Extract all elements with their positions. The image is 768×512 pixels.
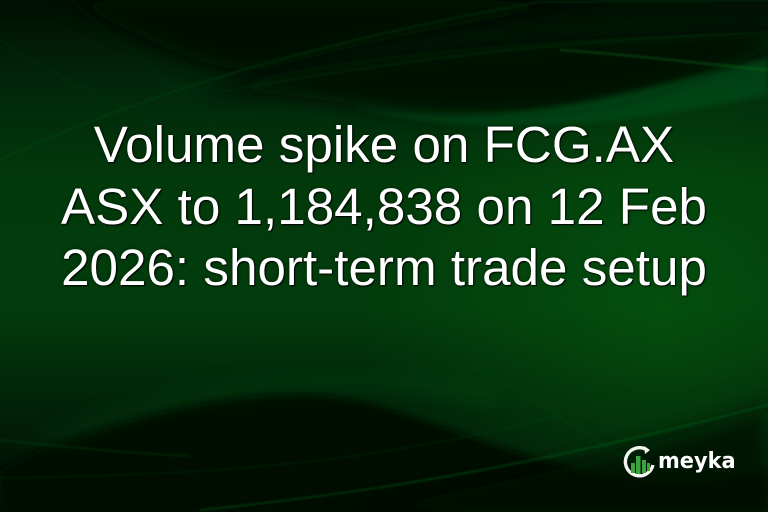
bottom dark hills bbox=[0, 394, 768, 512]
title bbox=[61, 116, 707, 298]
bottom wave lines and bands bbox=[0, 365, 768, 510]
top dark sweep bbox=[60, 0, 640, 70]
title: ASX to 1,184,838 on 12 Feb bbox=[61, 178, 707, 234]
title: 2026: short-term trade setup bbox=[61, 239, 707, 296]
top lens band bbox=[350, 58, 768, 126]
logo: meyka bbox=[624, 446, 736, 478]
title: Volume spike on FCG.AX bbox=[94, 116, 674, 173]
top wave lines bbox=[0, 0, 768, 160]
logo wordmark: meyka bbox=[658, 449, 736, 474]
icon: ring with green bars bbox=[624, 446, 655, 478]
